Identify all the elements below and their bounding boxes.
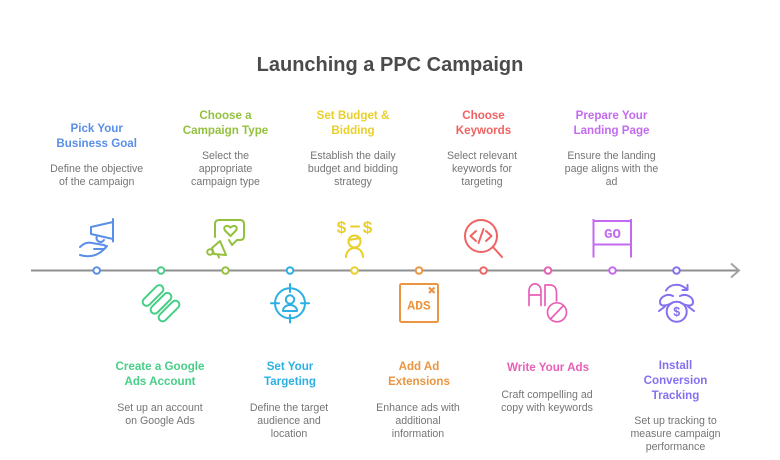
step: Install Conversion Tracking: Install xyxy=(659,359,692,372)
step: Choose a Campaign Type: appropriate xyxy=(199,163,252,175)
icon: ad blocked xyxy=(529,284,566,322)
step: Prepare Your Landing Page: ad xyxy=(606,176,617,188)
step: Choose Keywords: keywords for xyxy=(452,163,512,175)
step: Prepare Your Landing Page xyxy=(565,109,658,258)
step: Pick Your Business Goal xyxy=(50,122,143,256)
step: Choose a Campaign Type: Campaign Type xyxy=(183,124,269,137)
step: Set Budget & Bidding: budget and bidding xyxy=(308,163,398,175)
step: Install Conversion Tracking: measure campaign xyxy=(630,428,721,440)
icon: dollar conversion cycle: $ xyxy=(673,305,680,319)
step: Choose a Campaign Type: Select the xyxy=(202,150,249,162)
step: Set Your Targeting: audience and xyxy=(257,415,321,427)
icon: megaphone in hand xyxy=(80,219,113,256)
icon: ads window xyxy=(400,284,438,322)
step: Create a Google Ads Account: on Google Ads xyxy=(125,415,195,427)
icon: person with dollar signs: $ xyxy=(337,218,347,237)
step: Install Conversion Tracking: performance xyxy=(646,441,705,453)
step: Write Your Ads: copy with keywords xyxy=(501,402,593,414)
timeline markers xyxy=(93,267,680,274)
step: Install Conversion Tracking xyxy=(630,285,721,453)
title: Launching a PPC Campaign xyxy=(257,54,523,76)
step: Set Budget & Bidding xyxy=(308,109,398,257)
step: Write Your Ads: Craft compelling ad xyxy=(501,389,593,401)
step: Prepare Your Landing Page: page aligns with the xyxy=(565,163,658,175)
step: Pick Your Business Goal: Pick Your xyxy=(70,122,123,135)
step: Set Your Targeting: Targeting xyxy=(264,375,316,388)
step: Choose Keywords: Choose xyxy=(462,109,505,122)
step: Choose a Campaign Type xyxy=(183,109,269,258)
step: Add Ad Extensions: additional xyxy=(395,415,441,427)
icon: linked capsules xyxy=(141,283,181,323)
step: Prepare Your Landing Page: Prepare Your xyxy=(576,109,648,122)
step: Install Conversion Tracking: Set up tracking to xyxy=(634,415,717,427)
step: Set Your Targeting xyxy=(250,284,328,440)
icon: person with dollar signs xyxy=(337,218,373,257)
step: Pick Your Business Goal: Business Goal xyxy=(56,137,137,150)
step: Add Ad Extensions: Extensions xyxy=(388,375,450,388)
step: Set Budget & Bidding: Establish the daily xyxy=(310,150,396,162)
step: Prepare Your Landing Page: Ensure the landing xyxy=(567,150,656,162)
step: Create a Google Ads Account xyxy=(116,283,205,427)
icon: go banner: GO xyxy=(604,227,621,243)
step: Add Ad Extensions xyxy=(376,284,460,440)
icon: dollar conversion cycle xyxy=(659,285,694,322)
step: Write Your Ads xyxy=(501,284,593,414)
icon: person with dollar signs: $ xyxy=(363,218,373,237)
step: Set Your Targeting: Define the target xyxy=(250,402,328,414)
step: Set Budget & Bidding: Set Budget & xyxy=(317,109,390,122)
step: Add Ad Extensions: Enhance ads with xyxy=(376,402,460,414)
step: Pick Your Business Goal: Define the objective xyxy=(50,163,143,175)
step: Set Your Targeting: location xyxy=(271,428,307,440)
timeline arrow xyxy=(31,264,739,278)
step: Create a Google Ads Account: Set up an account xyxy=(117,402,203,414)
step: Pick Your Business Goal: of the campaign xyxy=(59,176,134,188)
step: Create a Google Ads Account: Create a Google xyxy=(116,360,205,373)
step: Set Budget & Bidding: strategy xyxy=(334,176,373,188)
step: Choose Keywords xyxy=(447,109,517,257)
step: Add Ad Extensions: information xyxy=(392,428,444,440)
step: Choose Keywords: targeting xyxy=(461,176,503,188)
step: Set Your Targeting: Set Your xyxy=(267,360,314,373)
step: Choose a Campaign Type: campaign type xyxy=(191,176,260,188)
step: Write Your Ads: Write Your Ads xyxy=(507,361,589,374)
icon: magnifier with code xyxy=(465,220,502,257)
step: Choose Keywords: Select relevant xyxy=(447,150,517,162)
step: Choose Keywords: Keywords xyxy=(456,124,511,137)
icon: speech bubble and megaphone xyxy=(207,220,244,258)
icon: ads window: ADS xyxy=(407,298,431,314)
icon: go banner xyxy=(594,219,631,258)
step: Prepare Your Landing Page: Landing Page xyxy=(573,124,650,137)
step: Create a Google Ads Account: Ads Account xyxy=(124,375,196,388)
step: Choose a Campaign Type: Choose a xyxy=(199,109,252,122)
step: Install Conversion Tracking: Conversion xyxy=(644,374,707,387)
step: Add Ad Extensions: Add Ad xyxy=(399,360,439,373)
step: Set Budget & Bidding: Bidding xyxy=(331,124,375,137)
icon: target with person xyxy=(271,284,309,322)
step: Install Conversion Tracking: Tracking xyxy=(652,389,699,402)
